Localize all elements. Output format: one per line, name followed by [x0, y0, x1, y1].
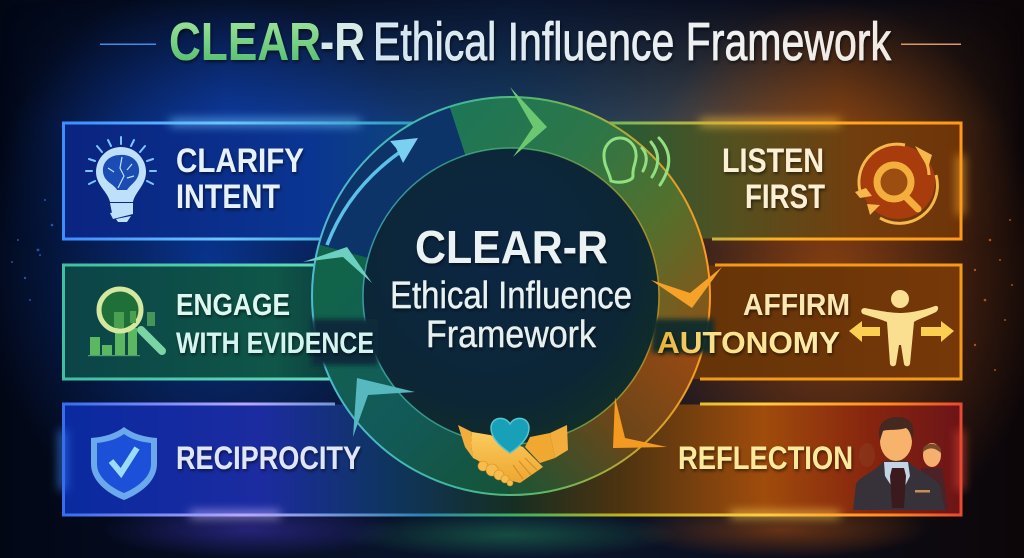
label: first: FIRST	[745, 178, 825, 216]
ring: lower left section	[312, 244, 511, 495]
title: hyphen R: -R	[320, 12, 365, 72]
title rule left	[100, 44, 156, 45]
panel: affirm autonomy	[680, 266, 961, 379]
label: affirm: AFFIRM	[743, 287, 850, 322]
label: reflection: REFLECTION	[678, 440, 853, 476]
label: clarify: CLARIFY	[176, 142, 304, 180]
panel: reciprocity and reflection band	[64, 404, 962, 514]
icon: lightbulb with brain	[86, 137, 156, 222]
panel: engage with evidence	[64, 266, 345, 379]
circular ring	[312, 97, 710, 495]
panel: clarify intent	[64, 124, 415, 238]
icon: listening head with sound waves	[604, 138, 669, 185]
icon: person with arms out and arrows	[849, 290, 954, 366]
arrow: blue upper-left	[327, 138, 418, 245]
center heading: CLEAR-R	[415, 221, 608, 273]
handshake: fingers	[478, 461, 513, 486]
title rule right	[901, 44, 961, 45]
label: intent: INTENT	[176, 178, 280, 216]
handshake: right cuff	[550, 425, 568, 458]
panel labels	[176, 142, 853, 476]
arrow: teal lower-left	[353, 378, 415, 437]
handshake: left hand	[471, 432, 543, 483]
arrow: orange lower-right	[613, 397, 667, 448]
label: with evidence: WITH EVIDENCE	[176, 327, 374, 360]
label: listen: LISTEN	[722, 142, 824, 180]
panel glow highlights	[60, 120, 963, 517]
center line 3: Framework	[426, 314, 597, 356]
arrow: orange right check	[651, 267, 722, 308]
handshake: right hand	[525, 433, 555, 463]
ring: lower right section	[511, 322, 707, 495]
arrow: green top chevron	[510, 87, 547, 157]
icon: businessman with colleagues	[853, 417, 948, 510]
label: reciprocity: RECIPROCITY	[176, 440, 361, 476]
icon: handshake with heart	[458, 418, 568, 486]
title	[169, 12, 892, 72]
arrow: teal left	[303, 247, 372, 283]
icon: heart	[491, 418, 529, 453]
ring: dark blue upper-left section	[319, 107, 465, 258]
title: CLEAR: CLEAR	[169, 12, 321, 72]
panel: listen first	[610, 124, 961, 238]
label: engage: ENGAGE	[176, 287, 290, 322]
icon: shield with check	[91, 427, 157, 500]
icon: magnifier in circular arrows	[855, 144, 937, 223]
dark bands behind overlapping labels	[312, 319, 714, 365]
ring: upper right section	[450, 97, 710, 331]
icon: magnifier over bar chart	[88, 289, 162, 356]
handshake: left cuff	[458, 425, 473, 458]
center label	[390, 221, 632, 356]
center line 2: Ethical Influence	[390, 275, 632, 317]
label: autonomy: AUTONOMY	[657, 325, 840, 360]
panel borders	[64, 123, 961, 515]
